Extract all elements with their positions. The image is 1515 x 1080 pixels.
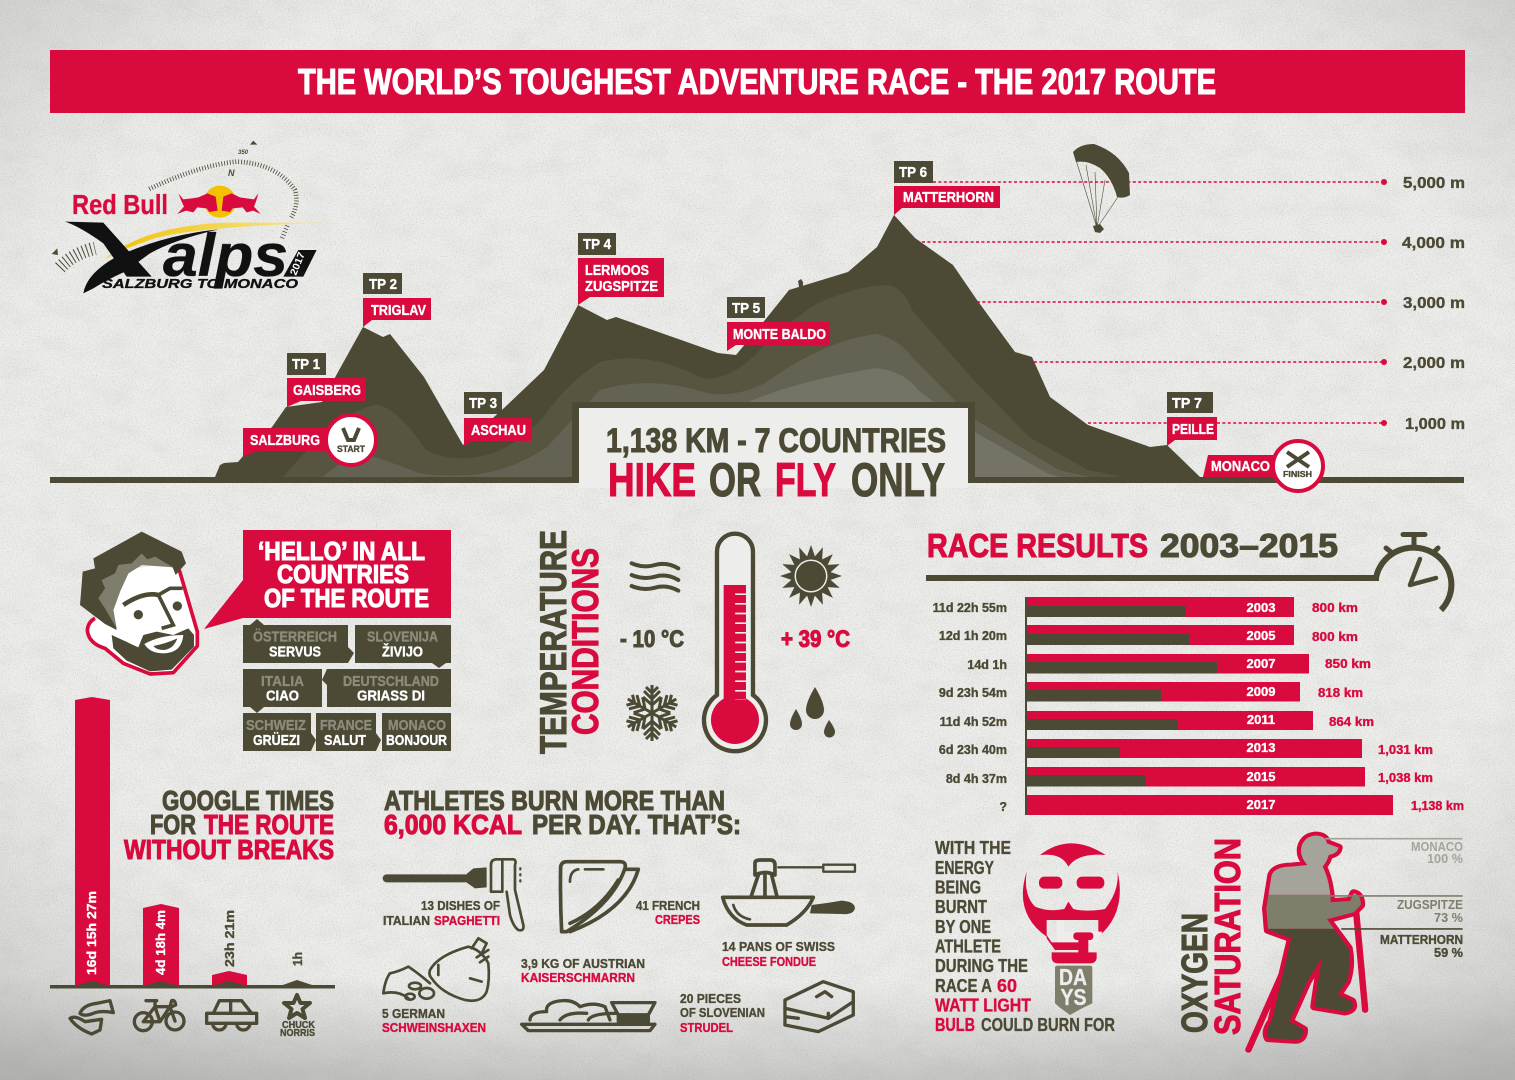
signposts: hello in each country [243,619,451,751]
sign: France [316,713,381,751]
waypoint: TP 6 Matterhorn: TP 6 [899,165,927,181]
heading: calories: ATHLETES BURN MORE THAN [384,785,725,816]
waypoint: Monaco finish: FINISH [1283,469,1312,479]
altitude scale: 5,000 m [1403,175,1465,192]
waypoint: TP 7 Peille: TP 7 [1172,396,1202,412]
icon: star with Chuck Norris caption [280,995,316,1039]
row 2009: 2009 [1247,684,1275,699]
heading: temperature conditions: CONDITIONS [565,548,606,735]
text block: light bulb energy: RACE A [935,975,992,996]
sign: Italy: CIAO [266,688,299,704]
food: spaghetti: ITALIAN [383,913,430,928]
waypoint: TP 2 Triglav: TP 2 [369,277,397,293]
sign: Switzerland: GRÜEZI [253,732,300,749]
row 2017: 2017 [1247,797,1275,812]
sign: Slovenia: ŽIVIJO [382,642,423,660]
logo: Red Bull X-Alps: 2017 [289,250,308,277]
icon: light bulb with 58 days [1023,843,1120,1015]
bar: chuck norris: 1h [290,952,305,966]
heading: oxygen saturation: SATURATION [1207,838,1248,1035]
waypoint: TP 2 Triglav [363,273,431,327]
icon: rain drops [790,687,835,738]
row 2009: 818 km [1318,686,1363,700]
oxygen levels labels: 73 % [1434,910,1463,925]
sign: Italy [243,669,322,713]
bar: walking [75,697,110,986]
sign: France: FRANCE [320,718,372,734]
row 2005: 12d 1h 20m [939,629,1007,643]
waypoint: Monaco finish [1203,441,1323,491]
icon: hiker on ridge [797,279,805,294]
altitude scale: 3,000 m [1403,295,1465,312]
row 2017: 1,138 km [1411,799,1464,813]
food: crepes: CREPES [655,912,700,927]
row 2013: 1,031 km [1378,743,1433,757]
waypoint: TP 3 Aschau: ASCHAU [471,423,526,439]
row 2013: 6d 23h 40m [939,743,1007,757]
logo: Red Bull X-Alps [52,141,330,293]
heading: google times: FOR [150,809,196,840]
icon: sun [780,545,842,607]
icon: light bulb with 58 days: DA [1059,964,1087,990]
icon: stopwatch [1376,534,1451,610]
bar: cycling: 4d 18h 4m [153,910,168,975]
illustration: hiker oxygen levels [1248,836,1463,1050]
chart: google times [50,697,335,988]
icon: wind [632,563,678,591]
sign: Monaco: BONJOUR [386,733,447,749]
bar: chuck norris [280,952,315,986]
text block: light bulb energy [935,837,1115,1035]
food: spaghetti: 13 DISHES OF [421,898,500,913]
row 2003: 800 km [1312,601,1358,615]
sign: Switzerland: SCHWEIZ [246,718,306,734]
row 2007: 14d 1h [967,658,1007,672]
heading: google times: WITHOUT BREAKS [124,834,334,865]
bar: driving: 23h 21m [222,910,237,967]
central route box: 1,138 KM - 7 COUNTRIES [606,422,946,460]
high temperature value: + 39 °C [781,626,850,653]
row 2007 [967,654,1371,674]
row 2005 [939,625,1358,645]
row 2009 [939,682,1363,702]
speech bubble: hello heading: COUNTRIES [277,561,409,589]
waypoint labels [243,161,1323,491]
icon: car [207,1001,257,1030]
oxygen levels labels [1380,839,1463,960]
food: kaiserschmarrn [521,956,655,1031]
waypoint: TP 4 Lermoos Zugspitze: TP 4 [583,237,611,253]
sign: Monaco [382,713,451,751]
row 2015 [946,767,1433,786]
row 2011: 2011 [1247,712,1275,727]
row 2011: 11d 4h 52m [940,715,1007,729]
sign: Switzerland [243,713,316,751]
food: spaghetti [383,859,523,930]
waypoint: TP 5 Monte Baldo [727,297,830,351]
waypoint: TP 3 Aschau: TP 3 [469,396,497,412]
food: fondue [722,860,855,969]
oxygen levels labels: MONACO [1411,839,1463,854]
sign: Germany: DEUTSCHLAND [343,674,439,690]
waypoint: TP 5 Monte Baldo: MONTE BALDO [733,327,826,343]
sign: Germany: GRIASS DI [357,688,425,704]
sign: Austria: ÖSTERREICH [253,628,337,646]
row 2003: 2003 [1247,600,1275,615]
food: fondue: 14 PANS OF SWISS [722,939,835,954]
waypoint: Salzburg start [243,415,376,465]
text block: light bulb energy: WITH THE [935,837,1011,858]
logo: Red Bull X-Alps: alps [163,222,288,289]
row 2009: 9d 23h 54m [939,686,1007,700]
waypoint: TP 7 Peille: PEILLE [1172,422,1214,438]
bar chart: race results [933,597,1464,815]
text block: light bulb energy: BURNT [935,896,988,917]
waypoint: TP 1 Gaisberg: GAISBERG [293,383,361,399]
oxygen levels labels: 100 % [1427,851,1463,866]
waypoint: TP 1 Gaisberg [287,353,366,407]
oxygen levels labels: 59 % [1434,945,1463,960]
icon: thermometer [704,534,766,751]
logo: Red Bull X-Alps: Red Bull [72,189,168,220]
icon: star with Chuck Norris caption: NORRIS [280,1028,315,1039]
icon: snowflake [623,685,681,741]
heading: calories: PER DAY. THAT’S: [532,809,741,840]
central route box: HIKE [608,453,696,506]
chart heading: race results: RACE RESULTS [927,528,1148,565]
illustration: bearded face [80,532,197,674]
text block: light bulb energy: COULD BURN FOR [981,1014,1115,1035]
waypoint: TP 1 Gaisberg: TP 1 [292,357,320,373]
waypoint: Salzburg start: SALZBURG [250,433,320,449]
heading: google times [124,785,334,865]
sign: Slovenia [355,625,451,668]
food: crepes: 41 FRENCH [636,898,700,913]
waypoint: Monaco finish: MONACO [1211,459,1270,475]
central route box: ONLY [851,453,945,506]
text block: light bulb energy: DURING THE [935,955,1028,976]
sign: Slovenia: SLOVENIJA [367,630,438,646]
icon: light bulb with 58 days: YS [1060,984,1086,1010]
logo: Red Bull X-Alps: SALZBURG TO MONACO [102,276,298,291]
food: kaiserschmarrn: 3,9 KG OF AUSTRIAN [521,956,645,971]
waypoint: TP 6 Matterhorn: MATTERHORN [903,190,994,206]
heading: temperature conditions [533,530,606,754]
text block: light bulb energy: ATHLETE [935,936,1001,956]
row 2005: 800 km [1312,630,1358,644]
icon: footprints [70,1001,113,1034]
speech bubble: hello heading: OF THE ROUTE [264,585,429,613]
altitude scale: 2,000 m [1403,355,1465,372]
chart heading: race results: 2003–2015 [1160,528,1338,565]
row 2011 [940,711,1374,730]
text block: light bulb energy: ENERGY [935,857,994,878]
sign: Austria: SERVUS [269,644,321,660]
waypoint: TP 7 Peille [1167,392,1217,446]
row 2017: ? [999,800,1007,814]
heading: oxygen saturation: OXYGEN [1174,913,1215,1033]
bar: cycling [143,904,179,986]
heading: oxygen saturation [1174,838,1248,1035]
waypoint: TP 4 Lermoos Zugspitze: LERMOOS [585,263,649,279]
row 2015: 2015 [1247,769,1275,784]
food: strudel: 20 PIECES [680,991,741,1006]
central route box: FLY [775,453,836,506]
waypoint: TP 6 Matterhorn [894,161,1000,215]
sign: Italy: ITALIA [261,674,304,690]
oxygen levels labels: ZUGSPITZE [1397,897,1463,912]
speech bubble: hello heading [204,530,451,629]
waypoint: TP 5 Monte Baldo: TP 5 [732,301,760,317]
food: spaghetti: SPAGHETTI [434,913,500,928]
chart heading: race results [926,528,1379,581]
text block: light bulb energy: BULB [935,1014,975,1035]
waypoint: TP 2 Triglav: TRIGLAV [371,303,426,319]
food: strudel [680,982,853,1035]
row 2011: 864 km [1329,715,1374,729]
sign: France: SALUT [324,733,366,749]
oxygen levels labels: MATTERHORN [1380,932,1463,947]
food: strudel: STRUDEL [680,1020,733,1035]
sign: Germany [322,669,451,707]
heading: calories: 6,000 KCAL [384,809,522,840]
speech bubble: hello heading: ‘HELLO’ IN ALL [258,538,425,566]
waypoint: TP 4 Lermoos Zugspitze [578,233,664,305]
altitude scale [922,175,1465,433]
sign: Monaco: MONACO [388,718,446,734]
row 2015: 8d 4h 37m [946,772,1007,786]
row 2013: 2013 [1247,740,1275,755]
row 2017 [999,795,1464,815]
food: schweinshaxen: SCHWEINSHAXEN [382,1020,486,1035]
heading: calories [384,785,741,840]
heading: google times: GOOGLE TIMES [162,785,334,816]
food: schweinshaxen [382,938,489,1035]
icon: star with Chuck Norris caption: CHUCK [282,1020,316,1031]
row 2005: 2005 [1247,628,1275,643]
text block: light bulb energy: BEING [935,876,981,898]
waypoint: TP 3 Aschau [464,392,532,446]
waypoint: Salzburg start: START [337,444,365,454]
row 2015: 1,038 km [1378,771,1433,785]
heading: temperature conditions: TEMPERATURE [533,530,574,754]
bar: walking: 16d 15h 27m [84,891,99,975]
row 2003 [933,597,1358,617]
food: kaiserschmarrn: KAISERSCHMARRN [521,970,635,985]
icon: paraglider [1073,144,1130,233]
food: schweinshaxen: 5 GERMAN [382,1006,445,1021]
altitude scale: 4,000 m [1402,235,1465,252]
text block: light bulb energy: 60 [997,975,1017,996]
row 2013 [939,739,1433,758]
logo: Red Bull X-Alps: N [228,168,235,178]
row 2003: 11d 22h 55m [933,601,1007,615]
row 2007: 2007 [1247,656,1275,671]
food: crepes [560,862,700,932]
heading: google times: THE ROUTE [204,809,334,840]
sign: Austria [243,619,354,663]
title banner: THE WORLD’S TOUGHEST ADVENTURE RACE - THE 2017 ROUTE [298,61,1216,102]
central route box [572,402,975,506]
waypoint: TP 4 Lermoos Zugspitze: ZUGSPITZE [585,279,658,295]
low temperature value: - 10 °C [620,626,684,653]
logo: Red Bull X-Alps: 350 [238,150,249,156]
bar: driving [212,910,247,986]
altitude scale: 1,000 m [1405,416,1465,433]
text block: light bulb energy: BY ONE [935,916,991,937]
food: fondue: CHEESE FONDUE [722,954,816,969]
row 2007: 850 km [1325,657,1371,671]
title banner [50,50,1465,113]
food: strudel: OF SLOVENIAN [680,1005,765,1020]
icon: bicycle [134,1000,184,1031]
text block: light bulb energy: WATT LIGHT [935,994,1032,1016]
elevation profile: mountains [50,215,1464,483]
central route box: OR [709,453,761,506]
